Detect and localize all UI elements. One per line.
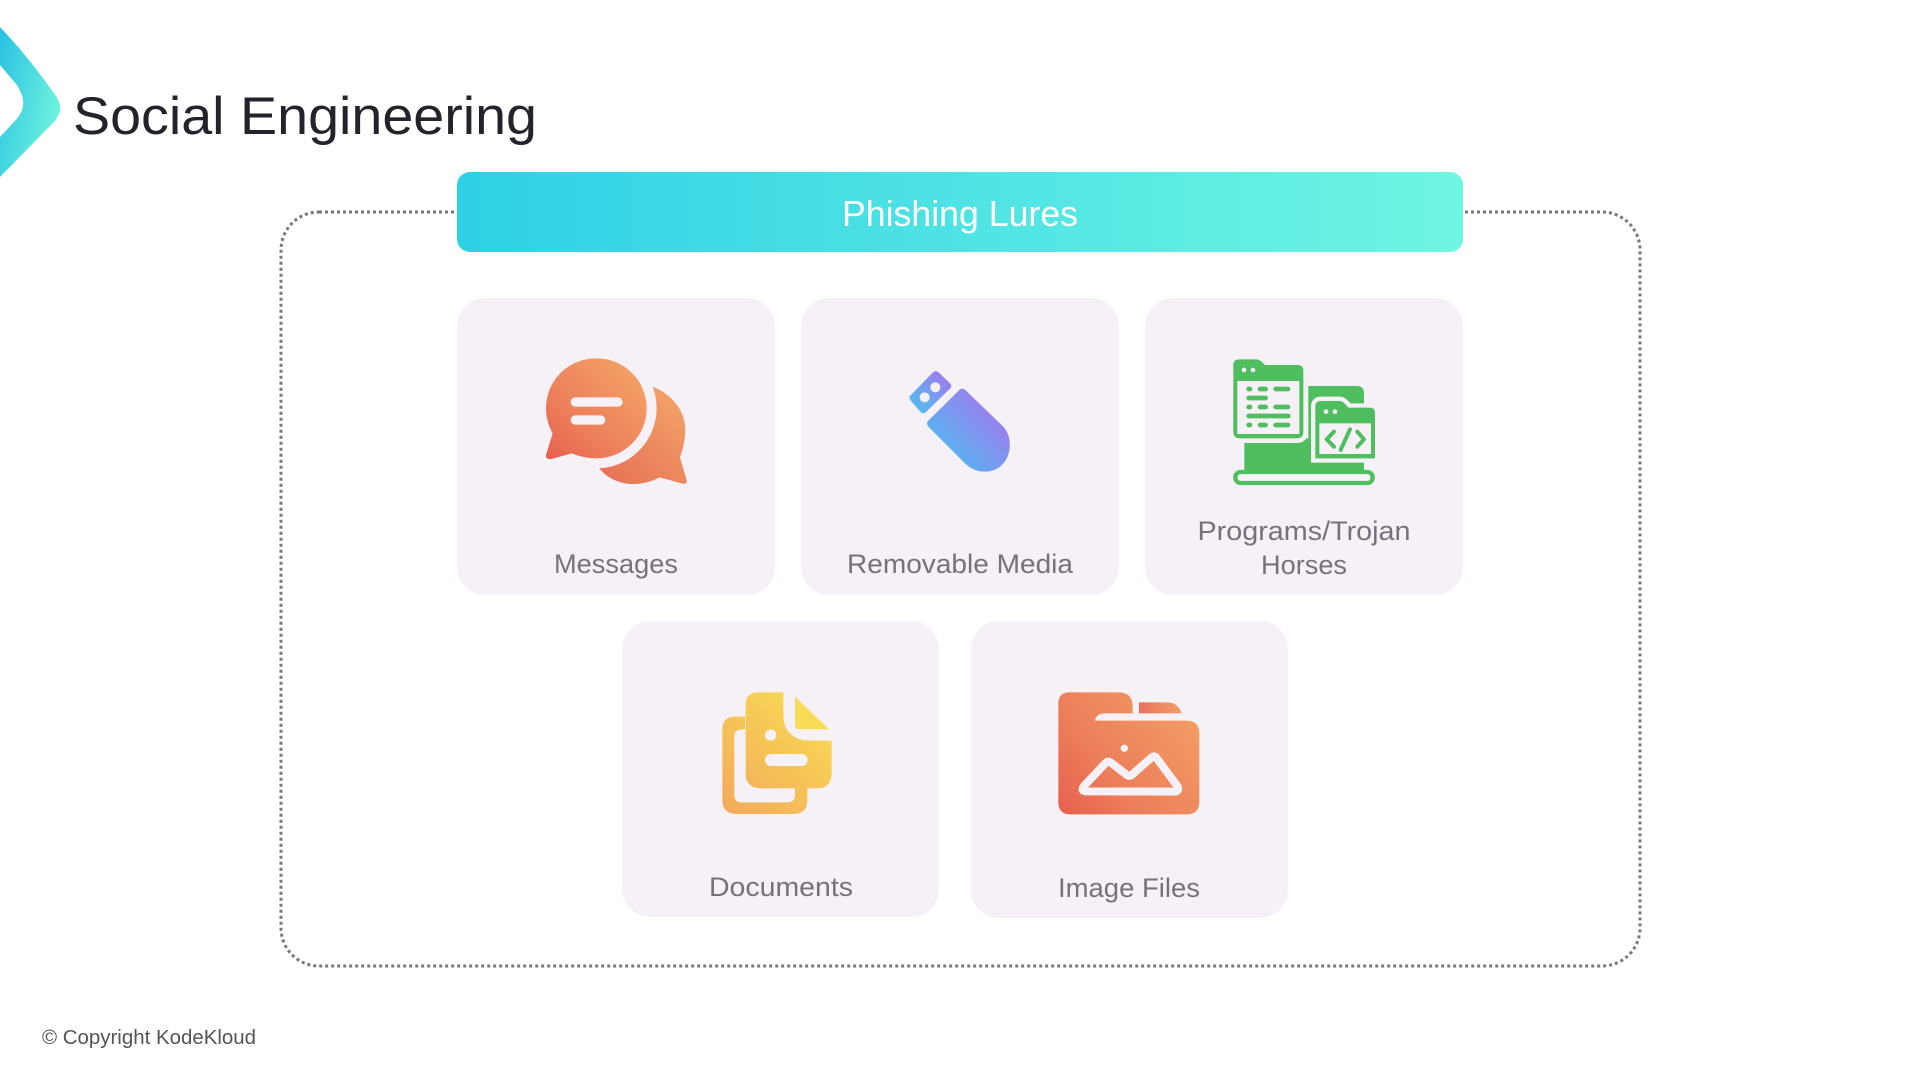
panel: Documents card xyxy=(622,621,939,917)
title: Social Engineering xyxy=(73,87,537,146)
footer: copyright: © Copyright KodeKloud xyxy=(42,1027,256,1049)
label: Image Files: Image Files xyxy=(1058,873,1200,903)
icon: chat bubbles xyxy=(546,358,687,484)
panel: Image Files card xyxy=(971,621,1288,918)
label: Documents: Documents xyxy=(709,872,853,902)
label: Messages: Messages xyxy=(554,549,678,579)
panel: Removable Media card xyxy=(801,298,1119,595)
label: Programs/Trojan Horses xyxy=(1198,516,1410,580)
panel: Messages card xyxy=(457,298,775,595)
panel: dotted container xyxy=(281,212,1640,966)
label: Programs/Trojan Horses: Horses xyxy=(1261,550,1347,580)
panel: Programs/Trojan Horses card xyxy=(1145,298,1463,595)
label: Programs/Trojan Horses: Programs/Trojan xyxy=(1198,516,1410,546)
label: Removable Media: Removable Media xyxy=(847,549,1074,579)
icon: laptop with code windows xyxy=(1233,359,1375,483)
icon: header chevron xyxy=(0,27,60,177)
icon: documents xyxy=(722,692,832,814)
icon: USB drive xyxy=(909,371,1010,472)
icon: image folder xyxy=(1058,692,1199,814)
heading banner: Phishing Lures xyxy=(457,172,1463,252)
heading banner: Phishing Lures: Phishing Lures xyxy=(842,193,1078,234)
